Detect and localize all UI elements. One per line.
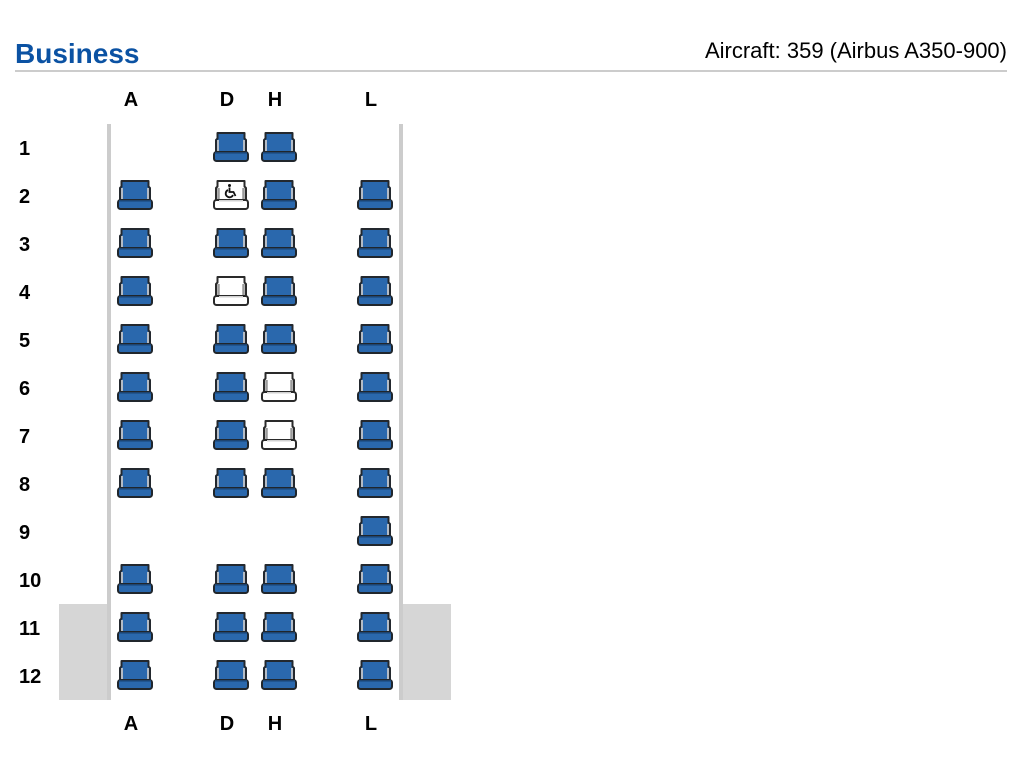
row 8 seats [118, 469, 392, 497]
row numbers: 9 [19, 522, 30, 544]
icon: wheelchair [226, 184, 236, 197]
top column headers: L [365, 89, 377, 111]
right cabin wall [399, 124, 403, 700]
row numbers: 8 [19, 474, 30, 496]
row numbers: 12 [19, 666, 41, 688]
bottom column headers: L [365, 713, 377, 735]
row 4 seats [118, 277, 392, 305]
row numbers: 3 [19, 234, 30, 256]
row numbers: 11 [19, 618, 40, 640]
right exit zone [403, 604, 451, 700]
aircraft label: Aircraft: 359 (Airbus A350-900) [705, 38, 1007, 63]
row 1 seats [214, 133, 296, 161]
row numbers: 10 [19, 570, 41, 592]
bottom column headers: D [220, 713, 234, 735]
heading: Business: Business [15, 38, 140, 69]
row numbers: 1 [19, 138, 30, 160]
row numbers: 2 [19, 186, 30, 208]
row numbers: 4 [19, 282, 31, 304]
row 10 seats [118, 565, 392, 593]
row numbers: 7 [19, 426, 30, 448]
row numbers [19, 138, 41, 688]
row 5 seats [118, 325, 392, 353]
seat grid [118, 133, 392, 689]
row 2 seats [118, 181, 392, 209]
row 3 seats [118, 229, 392, 257]
left cabin wall [107, 124, 111, 700]
bottom column headers: H [268, 713, 282, 735]
bottom column headers [124, 713, 377, 735]
top column headers [124, 89, 377, 111]
top column headers: A [124, 89, 138, 111]
row 9 seats [358, 517, 392, 545]
left exit zone [59, 604, 107, 700]
top column headers: D [220, 89, 234, 111]
bottom column headers: A [124, 713, 138, 735]
row 12 seats [118, 661, 392, 689]
top column headers: H [268, 89, 282, 111]
row 7 seats [118, 421, 392, 449]
row numbers: 5 [19, 330, 30, 352]
row numbers: 6 [19, 378, 30, 400]
row 6 seats [118, 373, 392, 401]
row 11 seats [118, 613, 392, 641]
